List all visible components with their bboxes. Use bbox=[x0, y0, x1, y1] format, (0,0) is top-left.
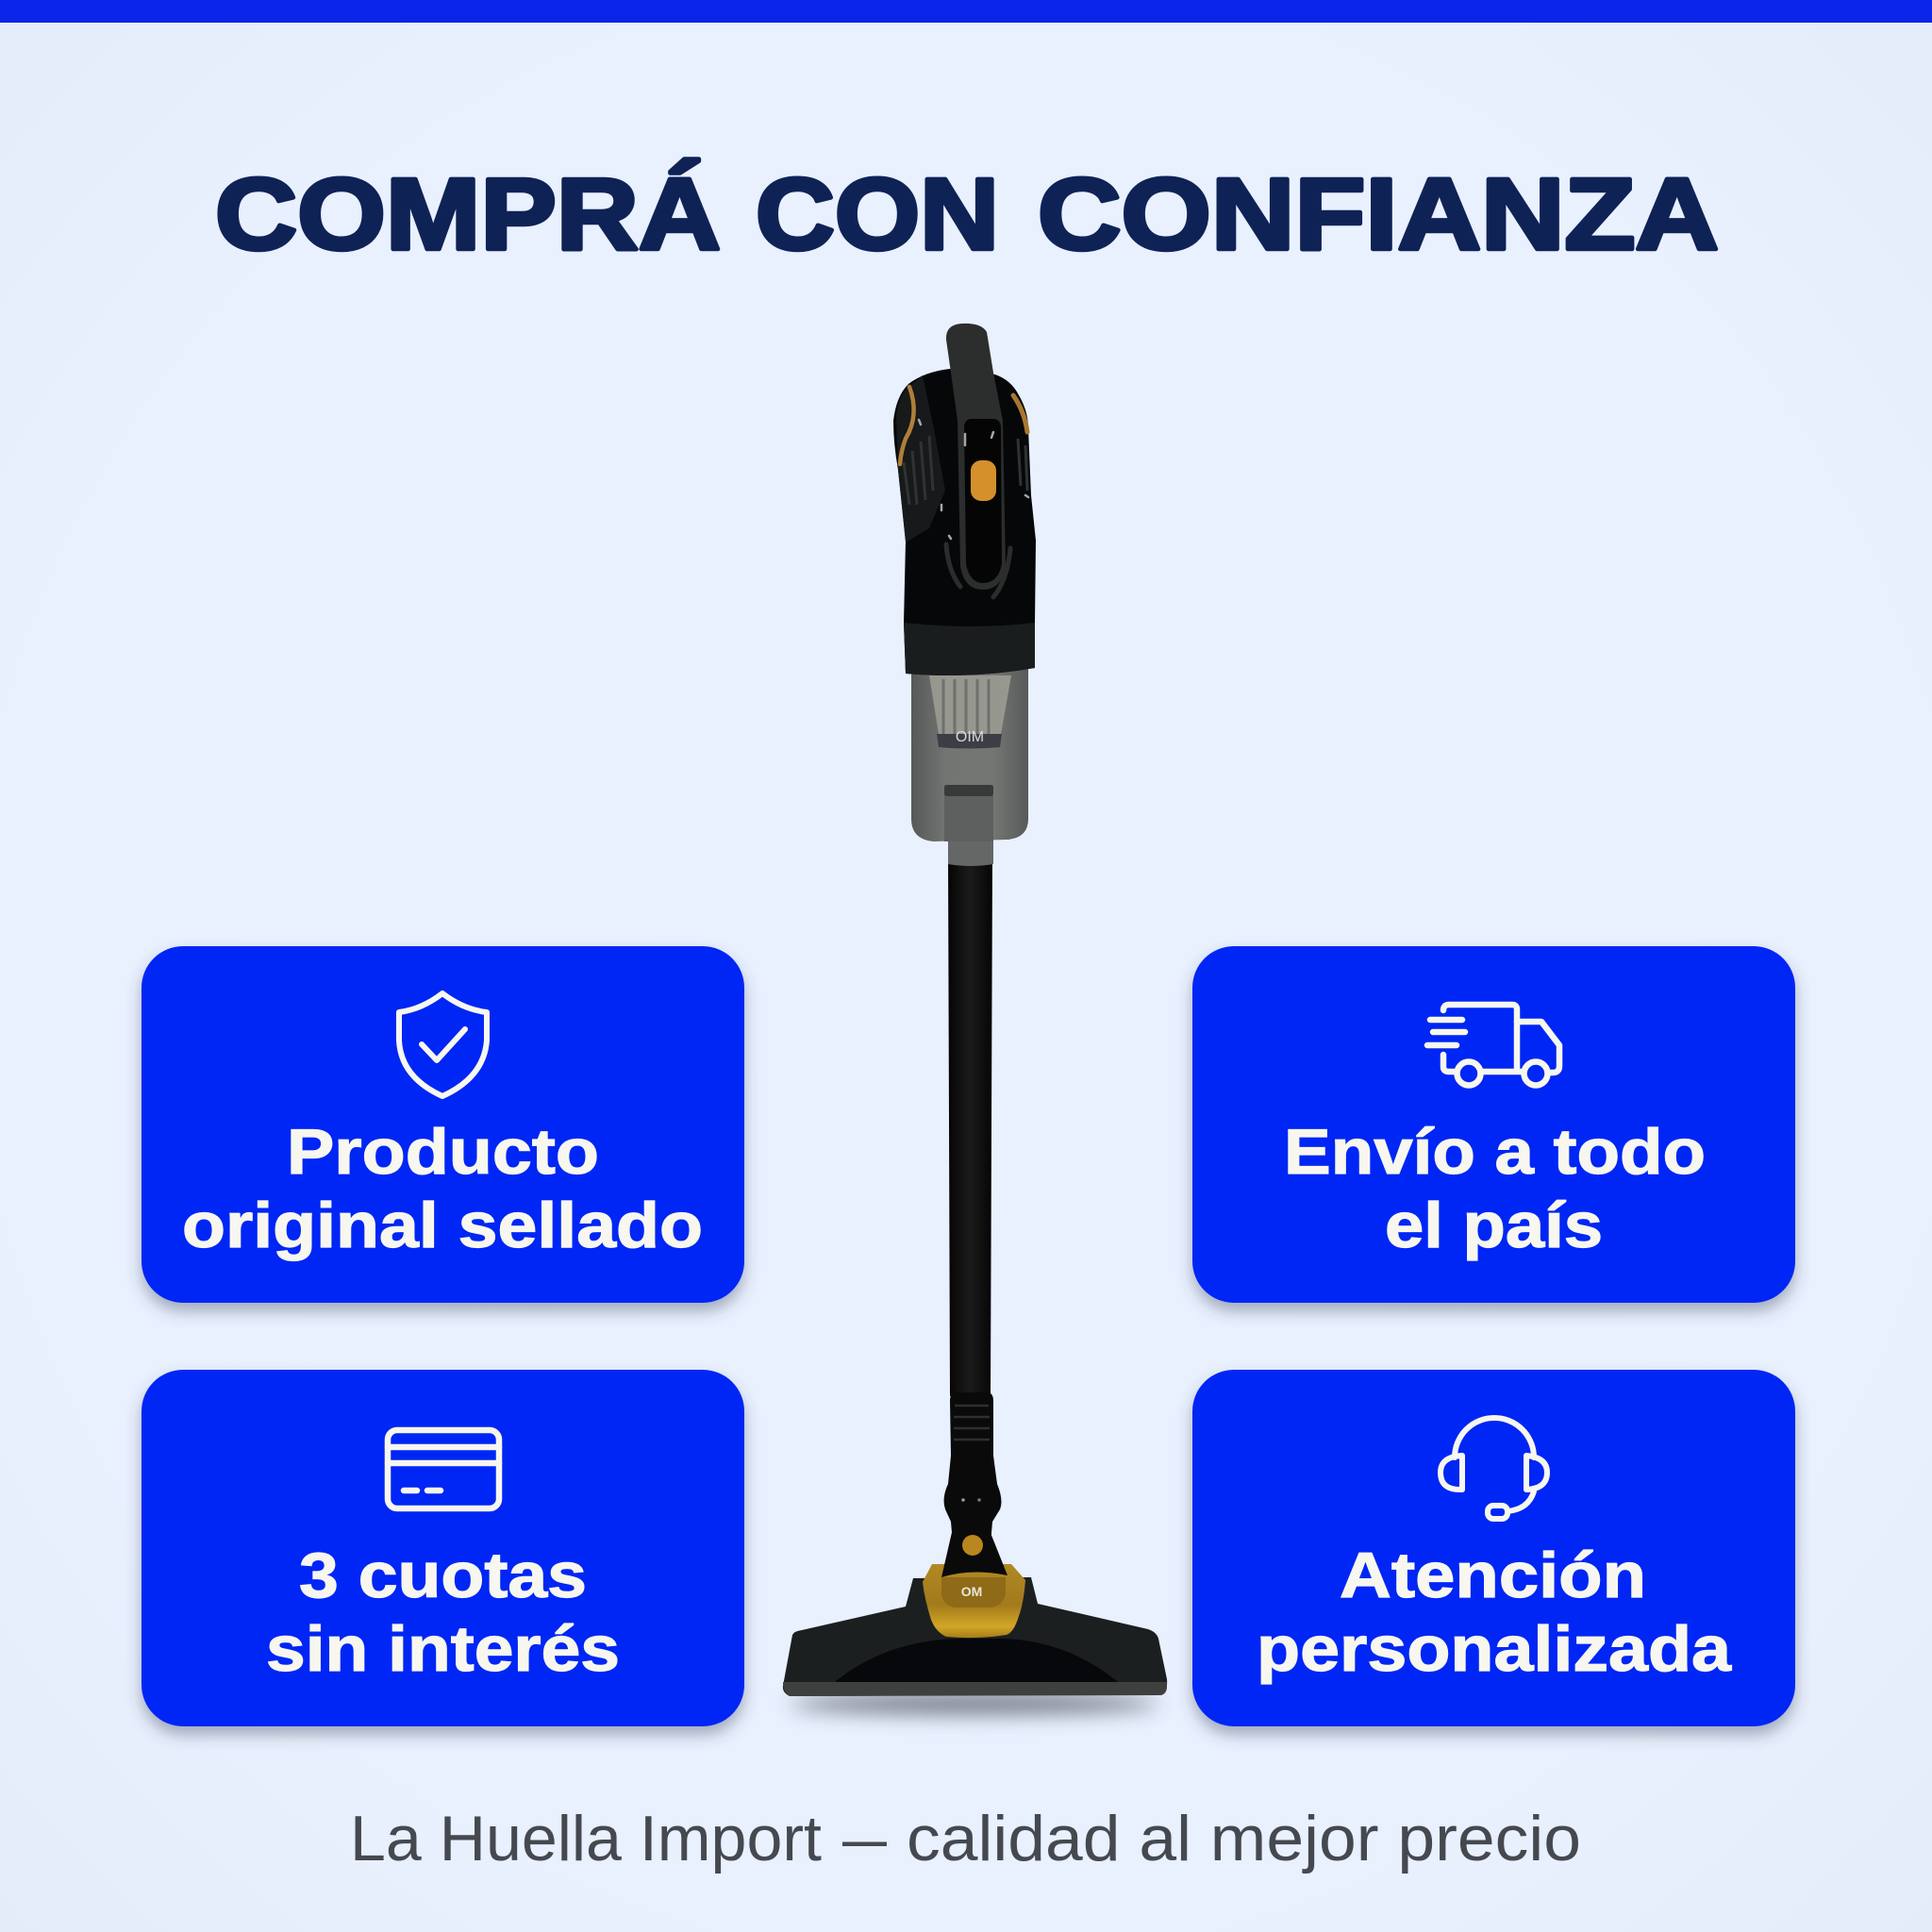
motor body bbox=[893, 369, 1036, 675]
card label bbox=[1257, 1540, 1732, 1685]
nozzle logo: OM bbox=[961, 1584, 982, 1599]
body highlights bbox=[919, 420, 1028, 539]
gold trim left bbox=[900, 387, 914, 464]
title: COMPRÁ bbox=[215, 157, 721, 271]
vacuum cleaner product image bbox=[783, 324, 1167, 1714]
power button bbox=[971, 460, 996, 501]
card background bbox=[1192, 1370, 1795, 1726]
handle recess bbox=[964, 419, 1002, 583]
card label: 3 cuotas bbox=[299, 1540, 587, 1611]
panel: producto original sellado bbox=[142, 946, 744, 1303]
handle bbox=[946, 324, 1006, 590]
icon: credit card bbox=[388, 1430, 499, 1508]
footer tagline: La Huella Import bbox=[350, 1803, 822, 1874]
card label: original sellado bbox=[182, 1190, 703, 1261]
card label: sin interés bbox=[266, 1613, 620, 1685]
title: CONFIANZA bbox=[1038, 157, 1719, 271]
joint bbox=[941, 1528, 1008, 1577]
footer tagline bbox=[350, 1803, 1581, 1874]
gold knob bbox=[962, 1535, 983, 1556]
footer tagline: — bbox=[842, 1803, 887, 1874]
card background bbox=[1192, 946, 1795, 1303]
gold housing bbox=[923, 1564, 1025, 1638]
card label: Atención bbox=[1340, 1540, 1646, 1611]
card background bbox=[142, 946, 744, 1303]
top bar bbox=[0, 0, 1932, 23]
card label: el país bbox=[1385, 1190, 1603, 1261]
handle base swooshes bbox=[946, 544, 1010, 597]
card label bbox=[1284, 1116, 1706, 1261]
title bbox=[215, 157, 1719, 271]
body side panels bbox=[896, 375, 945, 542]
floor nozzle head bbox=[783, 1577, 1167, 1696]
filter bbox=[929, 675, 1011, 749]
card label: Producto bbox=[287, 1116, 599, 1188]
dust cup bbox=[911, 668, 1028, 841]
shaft bbox=[948, 854, 992, 1396]
panel: atención personalizada bbox=[1192, 1370, 1795, 1726]
inner tube bbox=[944, 785, 993, 841]
icon: delivery truck bbox=[1427, 1005, 1559, 1085]
footer tagline: calidad al mejor precio bbox=[907, 1803, 1581, 1874]
vents bbox=[904, 436, 1027, 505]
panel: envío a todo el país bbox=[1192, 946, 1795, 1303]
floor shadow bbox=[791, 1693, 1158, 1714]
gold trim right bbox=[1013, 395, 1027, 432]
body band bbox=[904, 623, 1035, 675]
icon: shield with check bbox=[399, 993, 487, 1096]
card background bbox=[142, 1370, 744, 1726]
card label bbox=[266, 1540, 620, 1685]
neck bbox=[948, 840, 993, 866]
card label bbox=[182, 1116, 703, 1261]
card label: personalizada bbox=[1257, 1613, 1732, 1685]
title: CON bbox=[756, 157, 999, 271]
icon: headset bbox=[1441, 1418, 1547, 1519]
flexible collar bbox=[944, 1392, 1001, 1566]
gold housing center bbox=[941, 1577, 1006, 1607]
nozzle front arc bbox=[835, 1639, 1118, 1682]
filter: OIM bbox=[956, 729, 984, 745]
card label: Envío a todo bbox=[1284, 1116, 1706, 1188]
panel: 3 cuotas sin interés bbox=[142, 1370, 744, 1726]
nozzle front lip bbox=[783, 1682, 1167, 1696]
